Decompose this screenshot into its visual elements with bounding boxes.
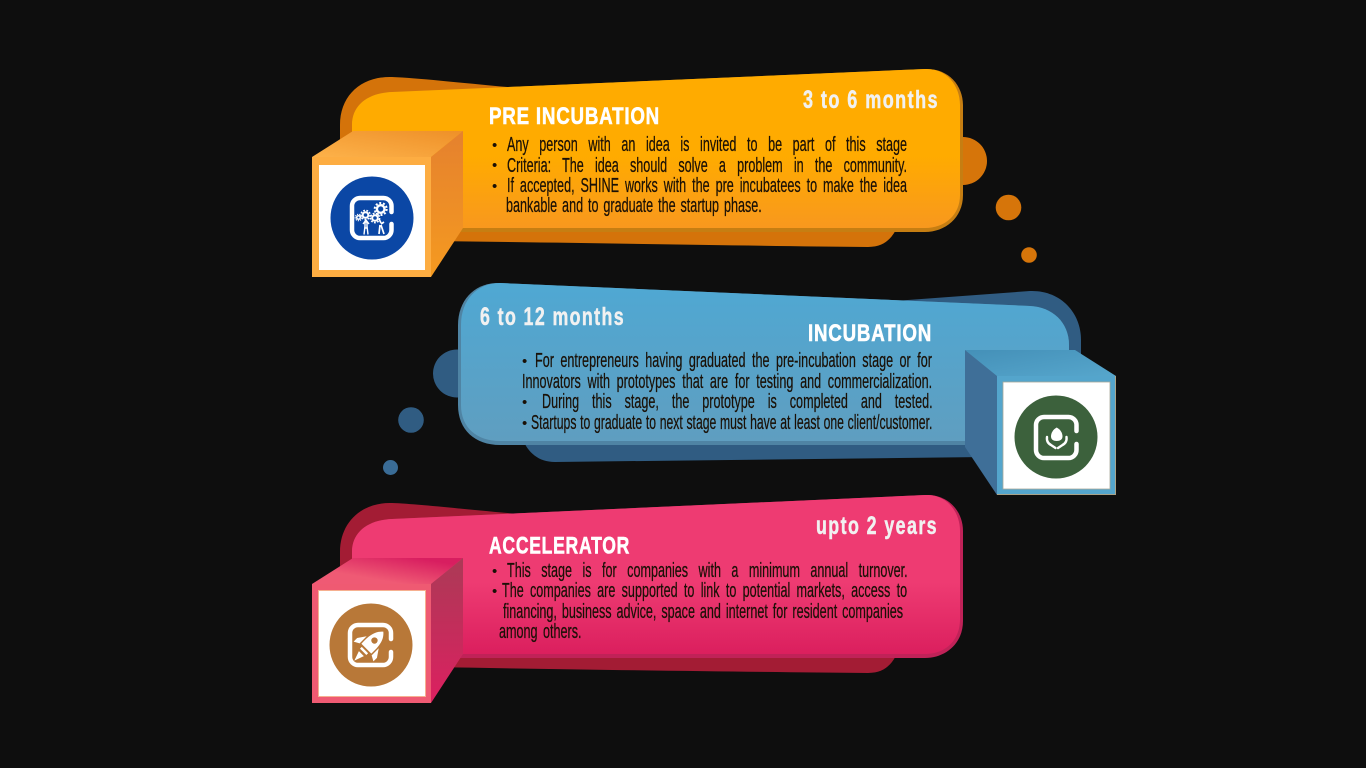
cube with icon <box>965 350 1116 495</box>
body text: incubation: Innovators with prototypes that are for testing and commercialization. <box>522 370 932 392</box>
body text: incubation: During this stage, the prototype is completed and tested. <box>542 390 932 412</box>
body text: accelerator: financing, business advice, space and internet for resident companies <box>503 601 903 623</box>
icon: rocket <box>330 604 412 686</box>
body text: pre incubation: If accepted, SHINE works with the pre incubatees to make the idea <box>507 175 907 197</box>
body text: pre incubation: • <box>492 137 497 154</box>
body text: pre incubation: bankable and to graduate the startup phase. <box>506 195 762 217</box>
duration: 6 to 12 months: 6 to 12 months <box>480 303 625 331</box>
body text: pre incubation: Any person with an idea is invited to be part of this stage <box>507 134 907 156</box>
body text: incubation <box>522 350 932 434</box>
body text: incubation: • <box>522 352 527 370</box>
duration: 3 to 6 months: 3 to 6 months <box>803 86 939 114</box>
panel: accelerator <box>312 495 963 703</box>
heading: pre incubation: PRE INCUBATION <box>489 103 660 130</box>
decorative dots: orange <box>996 194 1037 263</box>
body text: incubation: Startups to graduate to next stage must have at least one client/customer. <box>530 412 932 434</box>
body text: pre incubation <box>492 134 908 217</box>
heading: incubation: INCUBATION <box>808 320 932 347</box>
decorative dots: blue <box>383 407 424 475</box>
cube with icon <box>312 131 463 277</box>
body text: accelerator: among others. <box>499 621 582 643</box>
panel: pre incubation <box>312 69 987 277</box>
body text: pre incubation: Criteria: The idea should solve a problem in the community. <box>507 154 907 176</box>
icon: sprout in hands <box>1014 396 1098 478</box>
body text: accelerator: The companies are supported to link to potential markets, access to <box>502 580 907 602</box>
icon: gears and people <box>330 176 414 260</box>
body text: incubation: • <box>522 394 527 410</box>
heading: accelerator: ACCELERATOR <box>489 532 630 560</box>
body text: pre incubation: • <box>492 157 497 174</box>
body text: incubation: • <box>522 414 527 432</box>
cube with icon <box>312 558 463 703</box>
body text: accelerator: • <box>492 583 497 600</box>
body text: incubation: For entrepreneurs having graduated the pre-incubation stage or for <box>535 350 932 372</box>
body text: accelerator <box>492 560 907 643</box>
body text: pre incubation: • <box>492 178 497 194</box>
panel: incubation <box>433 283 1116 495</box>
body text: accelerator: • <box>492 563 497 580</box>
body text: accelerator: This stage is for companies with a minimum annual turnover. <box>506 560 907 582</box>
